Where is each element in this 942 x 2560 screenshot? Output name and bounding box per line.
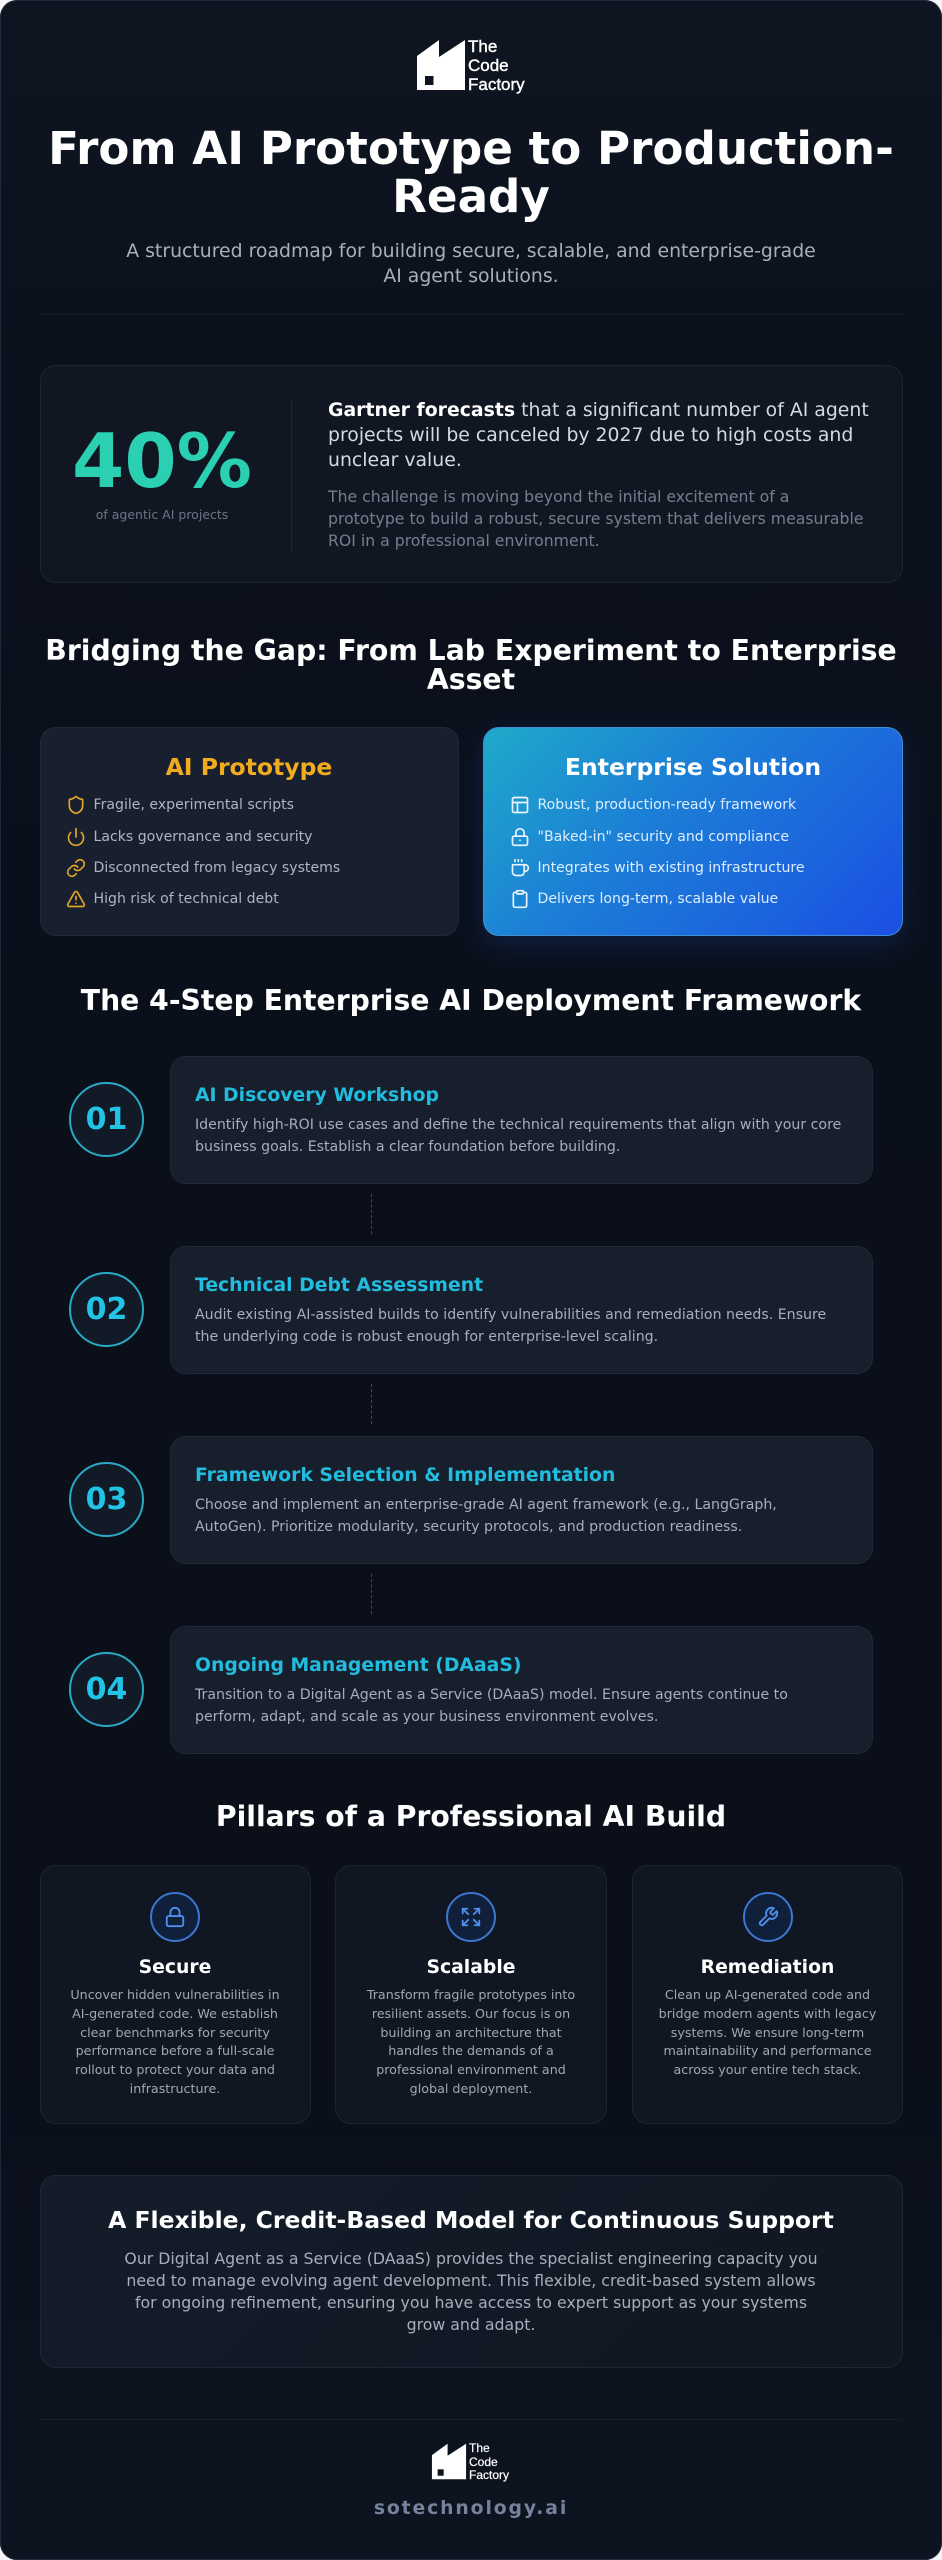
pillar: secure (40, 1865, 310, 2124)
header logo: The (468, 37, 497, 56)
heading: bridging the gap: Asset (427, 663, 515, 696)
panel: credit-based model (40, 2175, 902, 2368)
challenge text: ROI in a professional environment. (328, 531, 600, 550)
challenge text: prototype to build a robust, secure system that delivers measurable (328, 509, 863, 528)
header logo: Code (468, 56, 509, 75)
remediation description: bridge modern agents with legacy (659, 2006, 876, 2021)
title: From AI Prototype to Production- (48, 122, 894, 174)
step 4 title: Ongoing Management (DAaaS) (195, 1654, 521, 1676)
icon: lock (150, 1892, 200, 1942)
step 4 number: 04 (86, 1672, 127, 1706)
title (48, 122, 894, 222)
subtitle: AI agent solutions. (383, 266, 559, 287)
step 1 description: business goals. Establish a clear foundation before building. (195, 1139, 620, 1155)
step 1 title: AI Discovery Workshop (195, 1084, 439, 1106)
step 1 description: Identify high-ROI use cases and define the technical requirements that align with your core (195, 1117, 841, 1133)
icon: scale arrows (446, 1892, 496, 1942)
pillar: remediation (632, 1865, 903, 2124)
panel: Enterprise Solution (483, 727, 903, 936)
step 3 description (195, 1497, 777, 1535)
secure description: clear benchmarks for security (80, 2025, 270, 2040)
item: disconnected: Disconnected from legacy systems (94, 860, 340, 876)
footer logo: The (469, 2441, 490, 2455)
step 3 number: 03 (86, 1482, 127, 1516)
item: security: "Baked-in" security and compliance (538, 829, 789, 845)
step 4 number (69, 1652, 144, 1726)
secure description: rollout to protect your data and (75, 2062, 275, 2077)
heading: bridging the gap (45, 634, 897, 696)
secure description: infrastructure. (130, 2081, 220, 2096)
forecast text (328, 400, 869, 471)
prototype heading: AI Prototype (166, 753, 332, 781)
scalable title: Scalable (426, 1956, 516, 1978)
step 1 number (69, 1082, 144, 1156)
scalable description (366, 1987, 575, 2096)
enterprise heading: Enterprise Solution (565, 753, 821, 781)
secure description: Uncover hidden vulnerabilities in (70, 1987, 280, 2002)
scalable description: professional environment and (376, 2062, 566, 2077)
forecast text: Gartner forecasts that a significant number of AI agent (328, 400, 869, 421)
remediation description: Clean up AI-generated code and (665, 1987, 870, 2002)
step 3 description: Choose and implement an enterprise-grade AI agent framework (e.g., LangGraph, (195, 1497, 777, 1513)
forecast text: projects will be canceled by 2027 due to high costs and (328, 425, 853, 446)
model description: grow and adapt. (407, 2315, 535, 2334)
secure description: performance before a full-scale (76, 2043, 274, 2058)
secure title: Secure (139, 1956, 211, 1978)
scalable description: resilient assets. Our focus is on (372, 2006, 570, 2021)
subtitle: A structured roadmap for building secure, scalable, and enterprise-grade (126, 240, 816, 262)
heading: bridging the gap: Bridging the Gap: From Lab Experiment to Enterprise (45, 634, 897, 667)
step 3 card (170, 1436, 873, 1564)
item: technical debt: High risk of technical debt (94, 891, 279, 907)
remediation description: maintainability and performance (663, 2043, 872, 2058)
step 2 number (69, 1272, 144, 1346)
challenge text (328, 487, 863, 550)
step 1 card (170, 1056, 873, 1184)
scalable description: handles the demands of a (388, 2043, 554, 2058)
step 4 card (170, 1626, 873, 1754)
remediation title: Remediation (701, 1956, 834, 1978)
header logo: Factory (468, 75, 525, 94)
step 3 description: AutoGen). Prioritize modularity, security protocols, and production readiness. (195, 1519, 742, 1535)
step 3 number (69, 1462, 144, 1536)
secure description (70, 1987, 280, 2096)
challenge text: The challenge is moving beyond the initial excitement of a (328, 487, 789, 506)
secure description: AI-generated code. We establish (72, 2006, 278, 2021)
model description (124, 2249, 818, 2334)
step 2 description: the underlying code is robust enough for enterprise-level scaling. (195, 1329, 658, 1345)
model heading: A Flexible, Credit-Based Model for Continuous Support (108, 2206, 834, 2234)
heading: framework: The 4-Step Enterprise AI Deployment Framework (81, 984, 861, 1017)
item: value: Delivers long-term, scalable value (538, 891, 778, 907)
pillar: scalable (335, 1865, 607, 2124)
item: fragile: Fragile, experimental scripts (94, 797, 294, 813)
remediation description: systems. We ensure long-term (671, 2025, 864, 2040)
step 4 description: Transition to a Digital Agent as a Service (DAaaS) model. Ensure agents continue to (195, 1687, 788, 1703)
scalable description: global deployment. (410, 2081, 532, 2096)
item: governance: Lacks governance and security (94, 829, 313, 845)
step 2 title: Technical Debt Assessment (195, 1274, 483, 1296)
model description: Our Digital Agent as a Service (DAaaS) provides the specialist engineering capacity you (124, 2249, 818, 2268)
model description: for ongoing refinement, ensuring you have access to expert support as your systems (135, 2293, 807, 2312)
footer logo: Code (469, 2454, 498, 2468)
title: Ready (392, 170, 550, 222)
step 2 description (195, 1307, 826, 1345)
step 1 description (195, 1117, 841, 1155)
forecast text: unclear value. (328, 450, 462, 471)
panel: AI Prototype (40, 727, 458, 936)
footer url: sotechnology.ai (374, 2498, 568, 2519)
remediation description (659, 1987, 876, 2077)
panel: Gartner statistic (40, 365, 902, 583)
item: framework: Robust, production-ready framework (538, 797, 796, 813)
scalable description: Transform fragile prototypes into (367, 1987, 575, 2002)
step 3 title: Framework Selection & Implementation (195, 1464, 615, 1486)
step 2 number: 02 (86, 1292, 127, 1326)
footer logo (432, 2441, 510, 2482)
footer logo: Factory (469, 2468, 509, 2482)
icon: wrench (742, 1892, 792, 1942)
stat caption: of agentic AI projects (96, 507, 228, 522)
subtitle (126, 240, 816, 287)
model description: need to manage evolving agent development. This flexible, credit-based system allows (126, 2271, 816, 2290)
scalable description: building an architecture that (380, 2025, 562, 2040)
heading: pillars: Pillars of a Professional AI Build (216, 1800, 726, 1833)
header logo (417, 37, 525, 94)
step 2 card (170, 1246, 873, 1374)
step 4 description: perform, adapt, and scale as your business environment evolves. (195, 1709, 658, 1725)
remediation description: across your entire tech stack. (674, 2062, 861, 2077)
stat: 40%: 40% (72, 417, 252, 505)
step 2 description: Audit existing AI-assisted builds to identify vulnerabilities and remediation needs. Ensure (195, 1307, 826, 1323)
step 4 description (194, 1687, 788, 1725)
item: integrates: Integrates with existing infrastructure (538, 860, 805, 876)
step 1 number: 01 (86, 1102, 127, 1136)
